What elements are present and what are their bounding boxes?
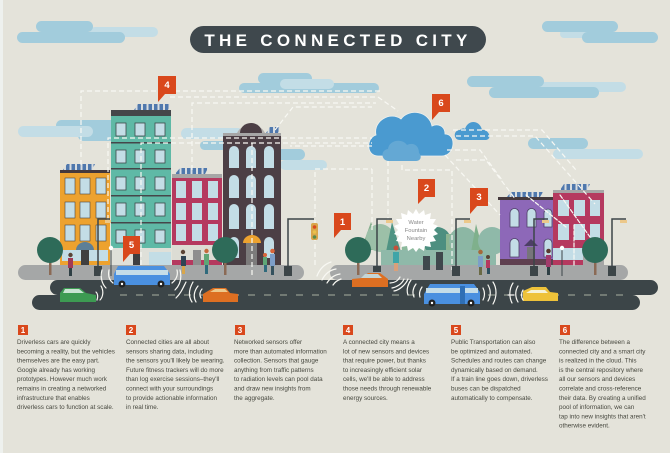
text block 6: tap into new insights that aren't [559, 413, 646, 420]
text block 4: lot of new sensors and devices [343, 348, 429, 355]
orange car [203, 288, 238, 302]
text block 1: Google already has working [17, 367, 96, 374]
text block 6: pool of information, we can [559, 404, 635, 411]
text block 2: sensors sharing data, including [126, 348, 213, 355]
text block 4: cells, we'll be able to address [343, 376, 425, 383]
marker 5: 5 [129, 240, 135, 251]
text block 6: correlate and cross-reference [559, 386, 642, 392]
text block 3 [234, 325, 327, 402]
marker 5 [123, 236, 140, 262]
building: right pink [553, 184, 604, 265]
text block 6: connected city and a smart city [559, 348, 646, 355]
text block 5: Schedules and routes can change [451, 358, 547, 365]
text block 2: than log exercise sessions–they'll [126, 376, 219, 383]
marker 3 [470, 188, 488, 214]
building: pink [172, 168, 222, 265]
text block 6: is the central repository where [559, 367, 643, 374]
green car [60, 288, 96, 302]
text block 5: If a train line goes down, driverless [451, 376, 548, 383]
text block 6 [559, 325, 646, 430]
text block 4: those needs through renewable [343, 386, 432, 392]
text block 2: connect with your surroundings [126, 386, 213, 392]
text block 4: 4 [346, 326, 351, 335]
traffic light [311, 223, 318, 240]
text block 4 [343, 325, 432, 402]
building: brown with dome [223, 123, 281, 265]
marker 3: 3 [476, 192, 482, 203]
text block 2: in real time. [126, 404, 159, 411]
bus 1 [114, 266, 170, 288]
text block 5: Public Transportation can also [451, 339, 536, 346]
dashed data lines [81, 91, 595, 275]
park elements: bins and pole lamps [109, 246, 564, 276]
text block 6: 6 [563, 326, 568, 335]
text block 6: their data. By creating a unified [559, 395, 646, 402]
text block 3: collection. Sensors that gauge [234, 358, 319, 365]
title: THE CONNECTED CITY [204, 31, 472, 50]
water fountain starburst: Nearby [407, 236, 425, 242]
text block 1: driverless cars to function at scale. [17, 404, 114, 411]
clouds in the sky [17, 21, 658, 170]
title [190, 26, 486, 53]
small cloud [455, 122, 489, 140]
text block 2: 2 [129, 326, 134, 335]
marker 1: 1 [340, 217, 346, 228]
water fountain starburst: Fountain [405, 228, 427, 234]
water fountain starburst [394, 209, 438, 252]
bus 2 [424, 284, 480, 306]
text block 1: infrastructure that enables [17, 395, 90, 402]
text block 3: 3 [238, 326, 243, 335]
text block 1: 1 [21, 326, 26, 335]
text block 1: becoming a reality, but the vehicles [17, 348, 115, 355]
building: orange [60, 164, 110, 265]
text block 5: buses can be dispatched [451, 386, 521, 392]
text block 6: is realized in the cloud. This [559, 358, 637, 365]
text block 3: anything from traffic patterns [234, 367, 314, 374]
text block 4: energy sources. [343, 395, 388, 402]
text block 6: otherwise evident. [559, 423, 610, 430]
text block 6: all our sensors and devices [559, 376, 635, 383]
orange car 2 [352, 273, 388, 287]
text block 1: themselves are the easy part. [17, 358, 100, 365]
text block 5: be optimized and automated. [451, 348, 532, 355]
text block 3: to radiation levels can pool data [234, 376, 323, 383]
marker 1 [334, 213, 351, 238]
text block 2: the sensors you'll likely be wearing. [126, 358, 225, 365]
street trees [37, 237, 608, 275]
text block 2: to provide actionable information [126, 395, 218, 402]
people [68, 246, 551, 276]
yellow car [523, 287, 558, 301]
text block 5: automatically to compensate. [451, 395, 533, 402]
text block 3: and draw new insights from [234, 386, 311, 392]
text block 5: 5 [454, 326, 459, 335]
text block 6: The difference between a [559, 339, 630, 346]
text block 4: A connected city means a [343, 339, 415, 346]
text block 3: Networked sensors offer [234, 339, 302, 346]
text block 3: the aggregate. [234, 395, 275, 402]
building: purple [498, 192, 553, 265]
street lamps [94, 219, 627, 276]
text block 3: more than automated information [234, 348, 327, 355]
marker 4 [158, 76, 176, 102]
text block 2 [126, 325, 225, 411]
building: teal with solar panel [111, 104, 171, 265]
water fountain starburst: Water [408, 220, 424, 226]
text block 4: that require power, but thanks [343, 358, 426, 365]
text block 5 [451, 325, 548, 402]
road [32, 280, 658, 310]
text block 5: dynamically based on demand. [451, 367, 538, 374]
text block 1: prototypes. However much work [17, 376, 108, 383]
marker 2: 2 [424, 183, 429, 194]
text block 2: Future fitness trackers will do more [126, 367, 224, 374]
text block 1: Driverless cars are quickly [17, 339, 91, 346]
marker 6 [432, 94, 450, 120]
marker 6: 6 [438, 98, 444, 109]
background trees in park [361, 222, 506, 266]
sidewalks [18, 265, 628, 280]
marker 4: 4 [164, 80, 170, 91]
text block 4: to increasingly efficient solar [343, 367, 422, 374]
marker 2 [418, 179, 435, 204]
vehicles [60, 266, 558, 306]
sensor waves [96, 262, 523, 304]
text block 1 [17, 325, 115, 411]
text block 2: Connected cities are all about [126, 339, 209, 346]
cloud hub [369, 112, 453, 161]
text block 1: remains in creating a networked [17, 386, 107, 392]
